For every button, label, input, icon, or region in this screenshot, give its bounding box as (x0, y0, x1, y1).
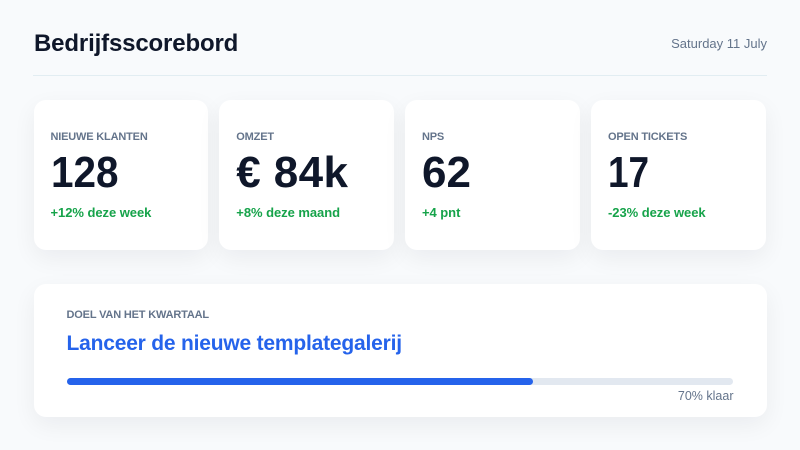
label: OPEN TICKETS (608, 131, 687, 143)
progress fill (66, 378, 533, 385)
progress bar (66, 378, 733, 385)
label: OMZET (236, 131, 274, 143)
change: +12% deze week (50, 205, 151, 220)
label: DOEL VAN HET KWARTAAL (66, 309, 209, 321)
panel: omzet (219, 100, 394, 250)
value: € 84k (236, 148, 348, 197)
panel: kwartaaldoel (34, 284, 766, 417)
panel: nps (405, 100, 580, 250)
goal heading: Lanceer de nieuwe templategalerij (66, 332, 402, 355)
value: 128 (50, 148, 118, 197)
panel: open tickets (591, 100, 766, 250)
change: +4 pnt (422, 205, 460, 220)
change: -23% deze week (608, 205, 706, 220)
panel: nieuwe klanten (34, 100, 208, 250)
change: +8% deze maand (236, 205, 340, 220)
value: 17 (608, 148, 649, 197)
progress caption: 70% klaar (678, 389, 734, 403)
value: 62 (422, 148, 471, 197)
date: Saturday 11 July (671, 36, 767, 51)
title: Bedrijfsscorebord (34, 30, 238, 57)
label: NIEUWE KLANTEN (50, 131, 148, 143)
label: NPS (422, 131, 444, 143)
